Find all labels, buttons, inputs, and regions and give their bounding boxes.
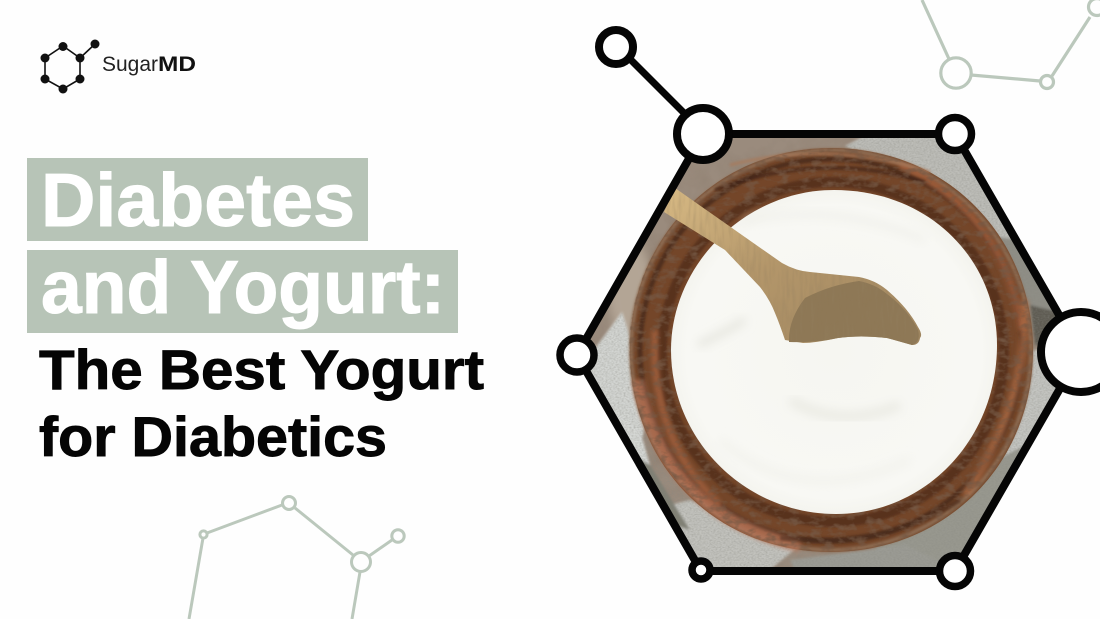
title highlight block: and Yogurt: and Yogurt: (41, 245, 445, 329)
photo: clay bowl (625, 145, 1037, 557)
decorative molecule: bottom center (189, 496, 404, 619)
subtitle: The Best Yogurt (39, 338, 484, 401)
node: right vertex (1041, 312, 1100, 392)
node: top right vertex (938, 118, 972, 150)
hexagon outline with nodes (560, 30, 1100, 586)
logo wordmark (102, 53, 196, 76)
logo wordmark: MD (158, 53, 196, 76)
node: top left vertex (677, 108, 729, 160)
subtitle: for Diabetics (39, 405, 387, 468)
hexagon edges (577, 134, 1066, 571)
node: bottom left vertex (692, 561, 710, 579)
photo background: stone surface (590, 138, 1038, 567)
photo: yogurt in a clay bowl with wooden spoon (590, 138, 1056, 567)
photo: grey cloth (590, 138, 1056, 567)
node: left vertex (560, 338, 594, 372)
logo: SugarMD (40, 40, 196, 94)
node: upper left (599, 30, 633, 64)
logo wordmark: Sugar (102, 53, 158, 76)
photo: wooden spoon (664, 189, 922, 345)
subtitle (39, 338, 484, 468)
connector to upper-left node (631, 60, 686, 115)
decorative molecule: top right (922, 0, 1100, 88)
photo: yogurt (671, 190, 997, 514)
title highlight block: Diabetes: Diabetes (41, 158, 355, 242)
logo icon: molecule (40, 40, 100, 94)
node: bottom right vertex (940, 556, 970, 586)
